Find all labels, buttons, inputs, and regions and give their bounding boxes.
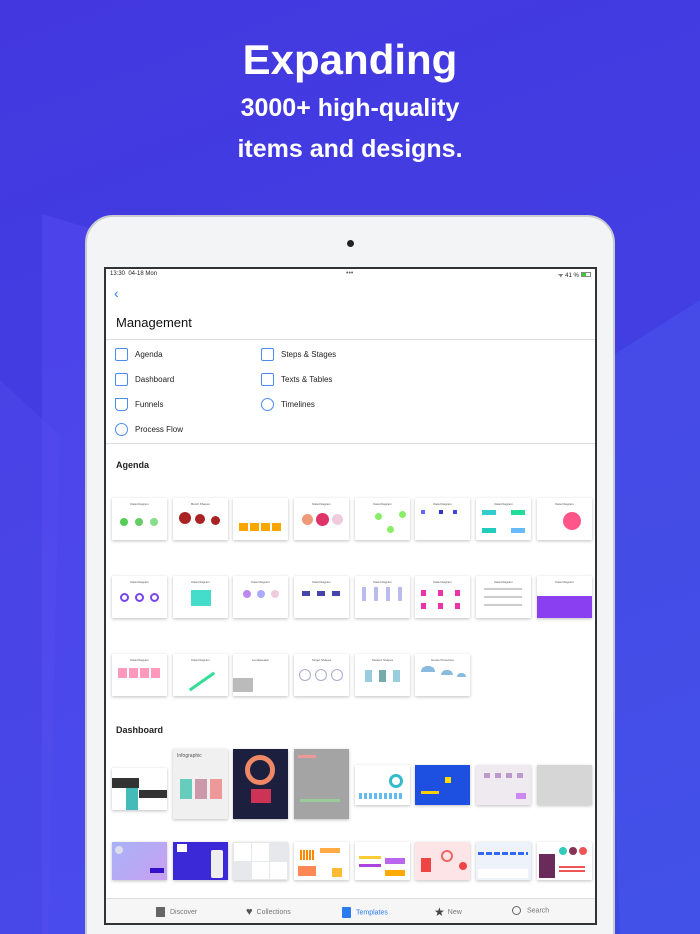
category list [115, 348, 336, 436]
agenda thumbnails: Data Diagram [373, 580, 392, 584]
agenda thumbnails: Data Diagram [251, 580, 270, 584]
category list: Steps & Stages [281, 350, 336, 359]
agenda thumbnails [110, 498, 594, 698]
title: Expanding [243, 36, 457, 83]
tab: Search: Search [527, 907, 549, 914]
tab: Discover: Discover [170, 909, 197, 916]
status bar: 13:30 04-18 Mon [110, 271, 157, 277]
category list: Dashboard [135, 375, 174, 384]
screen: ••• [346, 270, 353, 277]
heading: Management: Management [116, 315, 192, 330]
category list: Process Flow [135, 425, 183, 434]
subtitle: 3000+ high-quality [241, 94, 459, 122]
subtitle [237, 94, 463, 163]
heading: Dashboard: Dashboard [116, 725, 163, 735]
ipad device [85, 215, 615, 934]
screen: ᯤ 41 % [558, 273, 579, 279]
agenda thumbnails: Target Shapes [312, 658, 331, 662]
background shapes [42, 214, 700, 934]
tab: Templates [342, 907, 388, 918]
agenda thumbnails: Data Diagram [312, 502, 331, 506]
agenda thumbnails: Data Diagram [494, 502, 513, 506]
agenda thumbnails: Data Diagram [130, 658, 149, 662]
agenda thumbnails: Student Shapes [372, 658, 393, 662]
tab: Discover [156, 907, 198, 917]
agenda thumbnails: Data Diagram [433, 502, 452, 506]
agenda thumbnails: House Protection [431, 658, 454, 662]
agenda thumbnails: Bomb Shapes [191, 502, 210, 506]
tab: Search [512, 906, 549, 915]
agenda thumbnails: Data Diagram [191, 658, 210, 662]
dashboard thumbnails [110, 748, 594, 882]
agenda thumbnails: Data Diagram [130, 580, 149, 584]
agenda thumbnails: Data Diagram [191, 580, 210, 584]
subtitle: items and designs. [237, 135, 463, 163]
tab: New: ★ New [434, 905, 462, 919]
category list: Texts & Tables [281, 375, 332, 384]
agenda thumbnails: Data Diagram [130, 502, 149, 506]
agenda thumbnails: Data Diagram [555, 502, 574, 506]
category list: Timelines [281, 400, 315, 409]
dashboard thumbnails: Infographic [177, 753, 202, 759]
camera [347, 240, 354, 247]
screen [104, 267, 597, 925]
agenda thumbnails: Data Diagram [494, 580, 513, 584]
tab bar [106, 898, 595, 928]
category list: Funnels [135, 400, 163, 409]
back arrow: ‹ [114, 285, 119, 301]
tab: Collections: ♥ Collections [246, 906, 291, 918]
agenda thumbnails: Data Diagram [555, 580, 574, 584]
category list: Agenda [135, 350, 163, 359]
agenda thumbnails: Data Diagram [433, 580, 452, 584]
heading: Agenda: Agenda [116, 460, 149, 470]
agenda thumbnails: Loudspeaker [252, 658, 269, 662]
tab: Templates: Templates [356, 909, 388, 916]
agenda thumbnails: Data Diagram [373, 502, 392, 506]
agenda thumbnails: Data Diagram [312, 580, 331, 584]
